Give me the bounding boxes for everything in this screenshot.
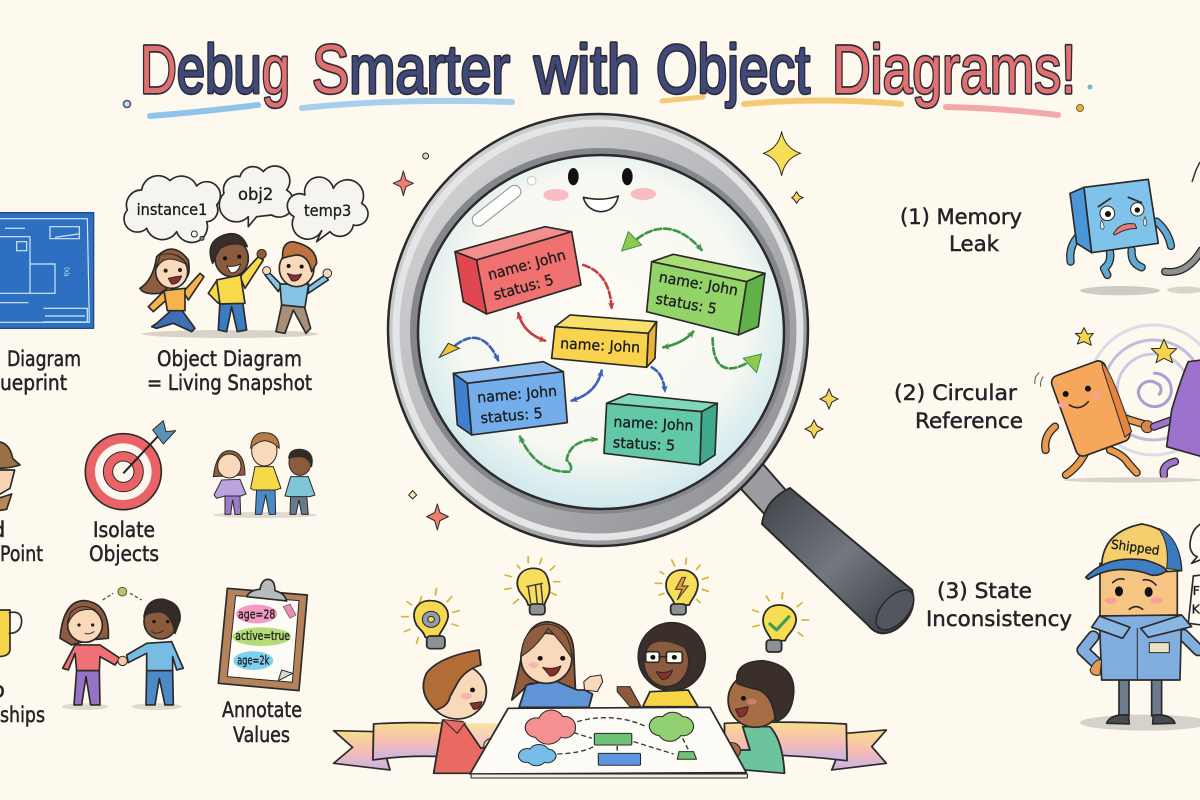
labels: debugging tips: ships xyxy=(0,703,45,727)
object box: red: name: John xyxy=(486,247,568,284)
object box: red: status: 5 xyxy=(492,271,556,304)
speech bubble and sign fragments: F xyxy=(1193,583,1200,598)
object box: blue: name: John xyxy=(477,383,558,407)
cube character xyxy=(1070,179,1171,275)
label: object diagram living snapshot: = Living Snapshot xyxy=(147,371,312,395)
shadow xyxy=(1080,286,1160,295)
panel: lens contents xyxy=(393,132,820,530)
object box: yellow xyxy=(552,315,657,367)
labels: failure modes: Inconsistency xyxy=(926,607,1072,631)
person: woman in blue shirt xyxy=(512,622,603,707)
relationship arrows xyxy=(439,229,762,472)
person: boy in green xyxy=(723,661,794,773)
labels: debugging tips xyxy=(0,518,302,747)
cap: Shipped xyxy=(1110,536,1161,558)
person: boy in red xyxy=(423,650,501,773)
icon: mug partial xyxy=(0,610,22,657)
shirt xyxy=(1083,615,1198,680)
title xyxy=(140,31,1076,108)
blueprint sheet: f(x) xyxy=(63,267,70,277)
object box: green xyxy=(647,254,765,335)
leak pipe xyxy=(1165,250,1200,272)
speech bubble and sign fragments: K xyxy=(1192,601,1200,616)
labels: debugging tips: Annotate xyxy=(222,698,302,722)
person: boy in light blue xyxy=(263,242,332,333)
icon: magnifying glass handle xyxy=(741,463,921,637)
speech bubble: temp3: temp3 xyxy=(304,201,351,220)
object box: green: status: 5 xyxy=(654,291,718,318)
person: girl in orange xyxy=(140,249,204,332)
label: object diagram living snapshot: Object Diagram xyxy=(157,347,302,371)
icon: annotated clipboard: age=28 xyxy=(238,608,275,622)
title: with xyxy=(533,31,640,108)
icon: two people shaking hands xyxy=(60,587,183,710)
speech bubble: temp3 xyxy=(287,177,368,242)
sparkles right of lens xyxy=(805,389,838,438)
speech bubble: obj2 xyxy=(219,166,294,227)
object box: blue xyxy=(453,362,567,435)
panel: collaborating team xyxy=(334,557,886,778)
object box: teal: name: John xyxy=(613,414,694,435)
banner ribbon xyxy=(334,722,886,770)
object box: blue: status: 5 xyxy=(480,405,543,427)
head xyxy=(1100,563,1177,628)
purple character partial xyxy=(1154,360,1200,475)
sparkles xyxy=(393,132,820,530)
labels: failure modes: (3) State xyxy=(937,579,1032,603)
icon: annotated clipboard xyxy=(218,579,307,691)
icon: detective partial xyxy=(0,442,20,511)
title: Smarter xyxy=(312,31,510,108)
right-edge fragments xyxy=(1167,162,1200,294)
person: woman with glasses in yellow xyxy=(617,623,705,707)
icon: annotated clipboard: age=2k xyxy=(237,653,270,667)
object box: yellow: name: John xyxy=(560,335,641,356)
object box: teal xyxy=(604,394,717,465)
icon: three small people xyxy=(213,433,317,518)
smiley face xyxy=(543,168,656,212)
panel: shipped worker character xyxy=(1080,523,1200,731)
legs xyxy=(1107,680,1175,724)
panel: memory leak character xyxy=(1035,179,1200,483)
magnifying glass lens xyxy=(388,114,808,546)
labels: debugging tips: Objects xyxy=(89,542,159,566)
orange character xyxy=(1035,359,1153,475)
label: object diagram living snapshot xyxy=(147,347,312,395)
face xyxy=(1105,579,1163,609)
speech bubble: instance1: instance1 xyxy=(137,200,207,219)
labels: failure modes: Reference xyxy=(915,409,1023,433)
panel: living snapshot people and speech bubbles xyxy=(124,166,368,338)
title: Object xyxy=(656,31,810,108)
object box: green: name: John xyxy=(658,269,739,299)
icon: annotated clipboard: active=true xyxy=(235,629,290,643)
title underlines and dots xyxy=(124,84,1092,116)
lightbulb: lightning xyxy=(655,558,708,615)
label: class diagram blueprint: Diagram xyxy=(7,347,81,371)
title: Debug xyxy=(140,31,290,108)
panel: debugging tips row xyxy=(0,421,317,710)
labels: failure modes: (1) Memory xyxy=(900,205,1022,229)
labels: debugging tips: Values xyxy=(233,723,290,747)
table with diagram xyxy=(470,707,747,778)
panel: blueprint class diagram xyxy=(0,213,94,328)
labels: failure modes: (2) Circular xyxy=(894,381,1017,405)
object box: red xyxy=(455,227,581,314)
speech bubble and sign fragments xyxy=(1188,523,1200,625)
labels: debugging tips: Point xyxy=(0,542,43,566)
icon: spiral xyxy=(1088,325,1200,455)
lightbulb: gear xyxy=(402,588,459,649)
object box: teal: status: 5 xyxy=(612,434,676,455)
speech bubble: instance1 xyxy=(124,176,220,242)
shadow xyxy=(1063,477,1200,483)
cap xyxy=(1086,524,1182,579)
person: man in yellow xyxy=(208,234,266,332)
label: class diagram blueprint: ueprint xyxy=(0,371,67,395)
labels: failure modes xyxy=(894,205,1072,631)
speech bubble: obj2: obj2 xyxy=(238,185,273,204)
ground shadow xyxy=(142,330,318,338)
ground shadow xyxy=(1080,715,1200,731)
labels: failure modes: Leak xyxy=(949,232,1000,256)
title: Diagrams! xyxy=(832,31,1076,108)
stars xyxy=(1075,328,1177,363)
icon: target with arrow xyxy=(85,421,176,510)
lightbulb: filament xyxy=(505,557,560,615)
lens highlight xyxy=(470,176,536,229)
label: class diagram blueprint xyxy=(0,347,81,395)
lightbulb: check xyxy=(753,593,808,652)
labels: debugging tips: Isolate xyxy=(93,518,155,542)
